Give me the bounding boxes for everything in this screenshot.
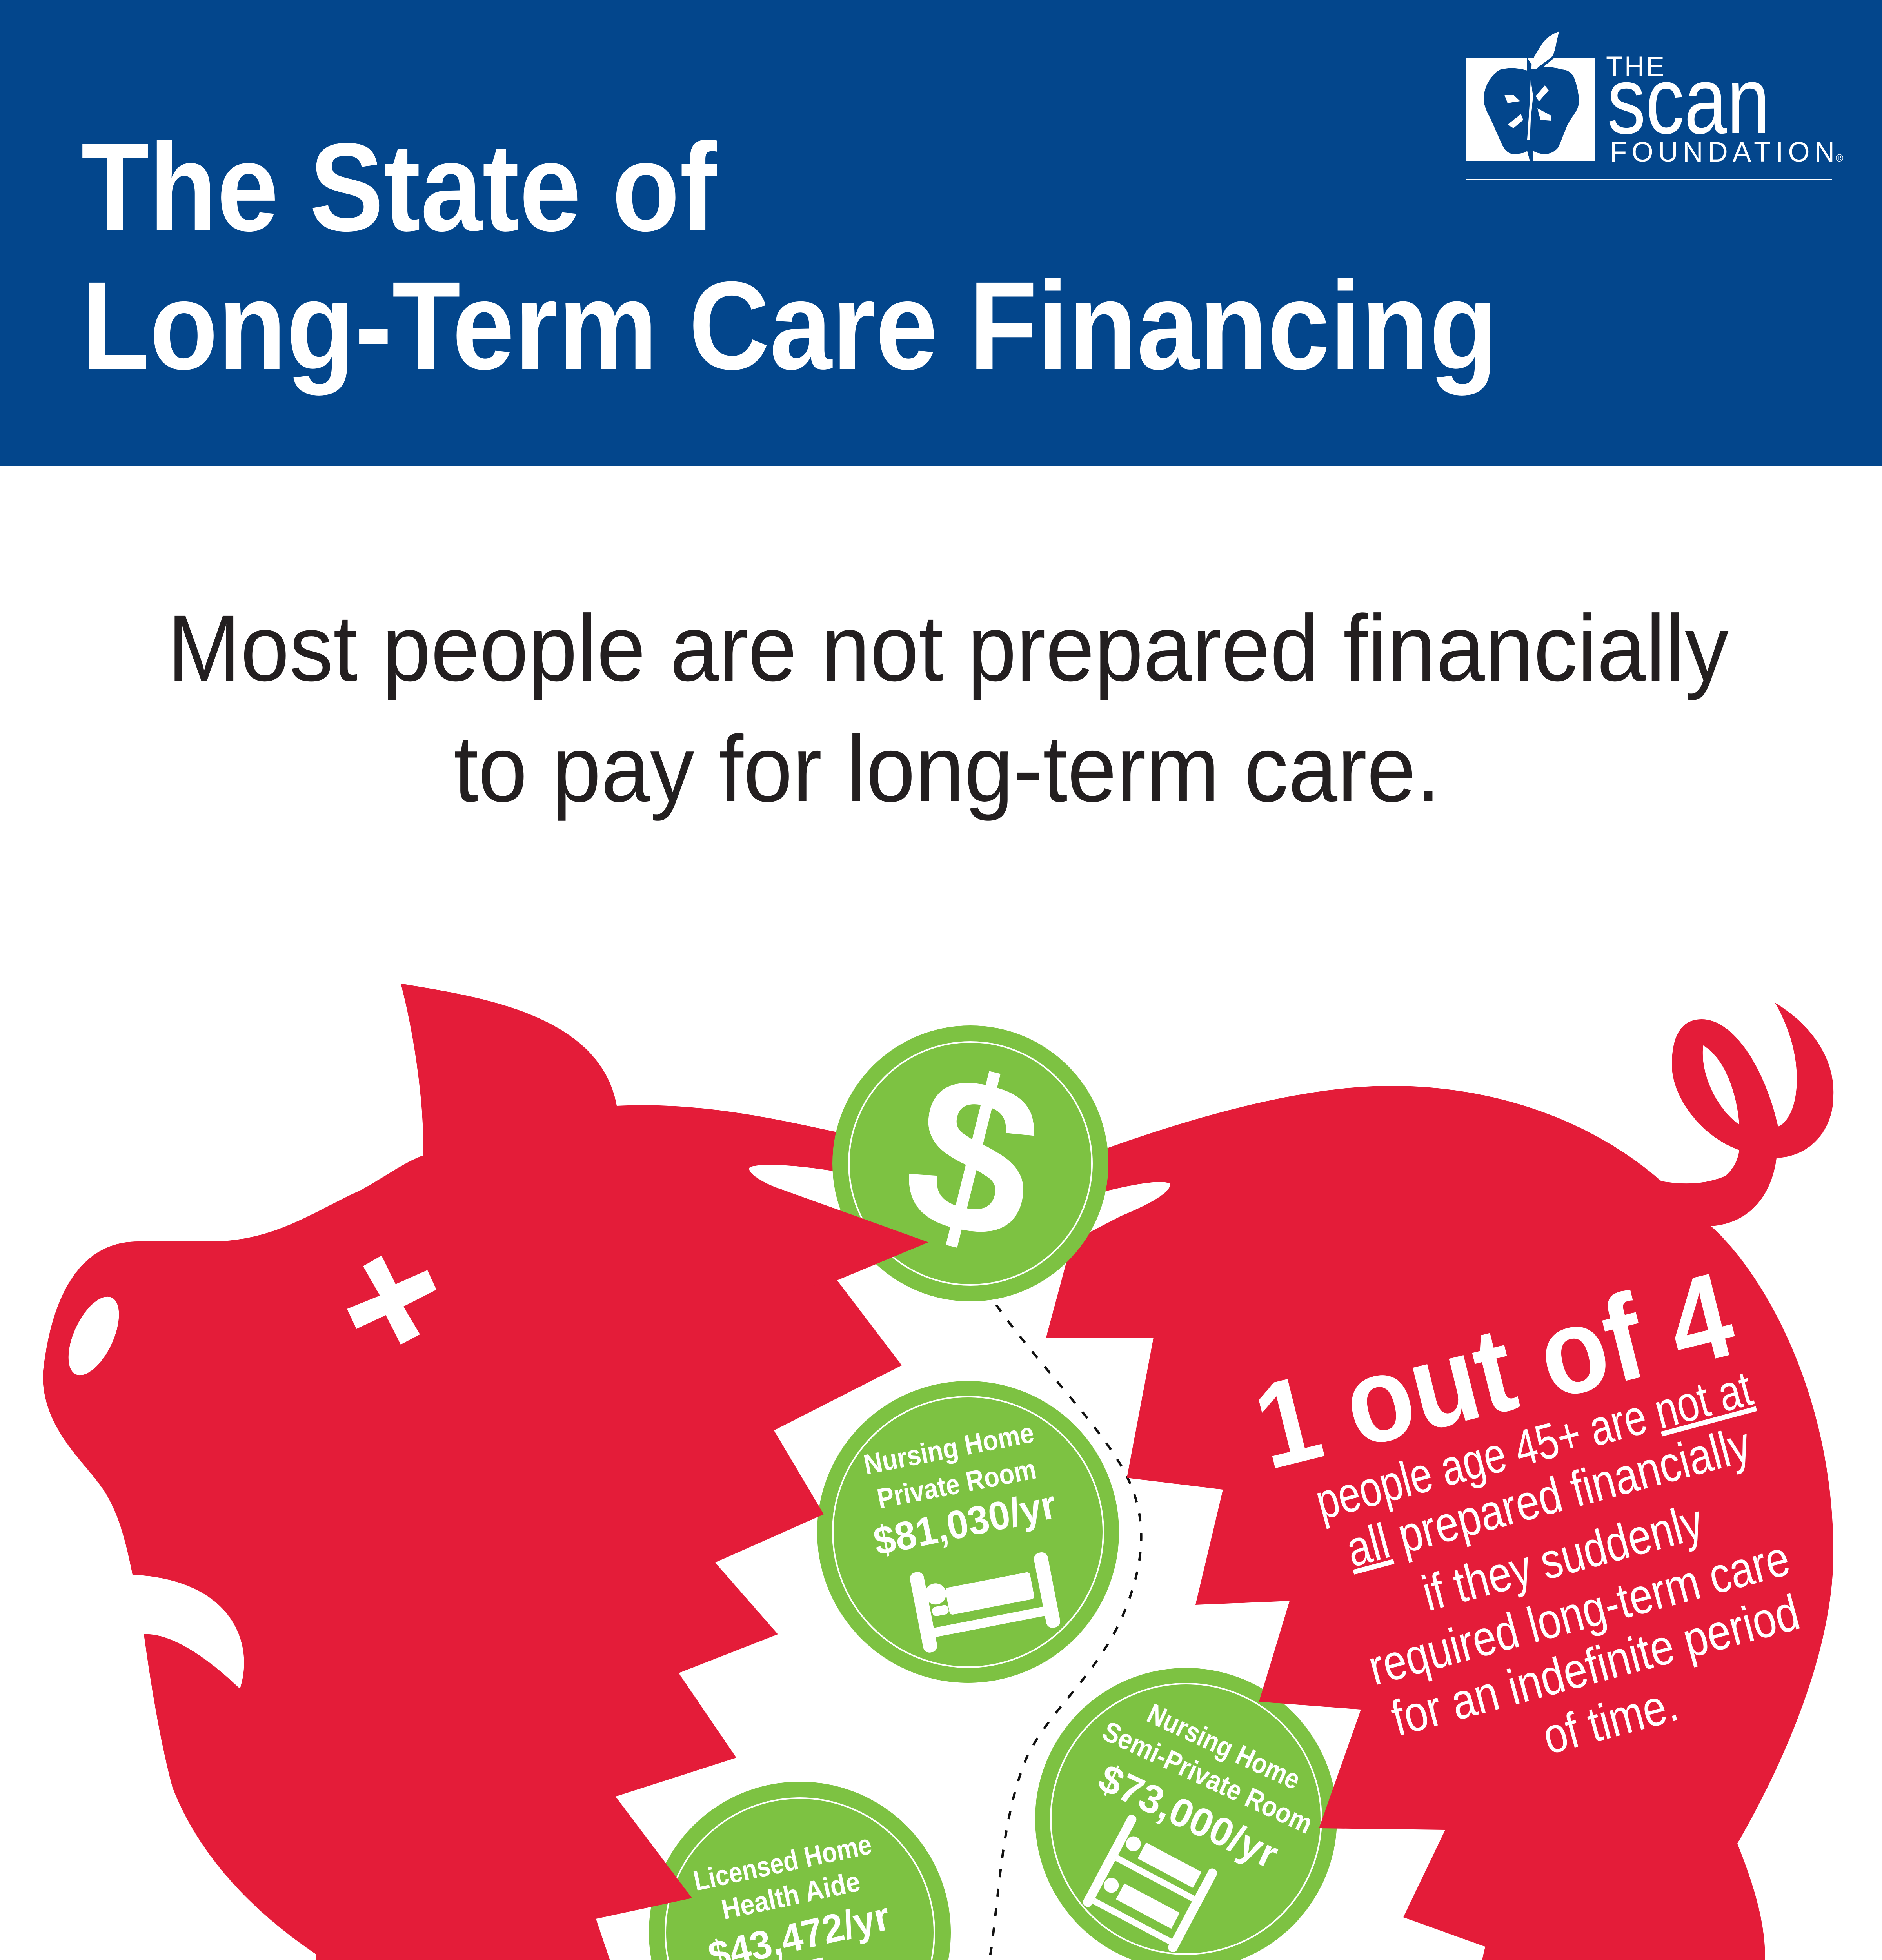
logo wordmark: [1466, 47, 1843, 180]
dollar coin: [832, 1023, 1108, 1301]
icon: dollar sign: $: [885, 1023, 1062, 1290]
icon: bed: [909, 1547, 1061, 1654]
left pig snout tip overlapping coin: [780, 1189, 928, 1294]
label: Health Aide: [719, 1866, 863, 1926]
label: [861, 1417, 1060, 1564]
headline: 1 out of 4: 1 out of 4: [1242, 1245, 1746, 1495]
left half of broken piggy bank: [43, 984, 928, 1960]
subtitle: to pay for long-term care.: [454, 716, 1441, 821]
coin: licensed home health aide: [649, 1782, 951, 1960]
icon: apple logo: [1466, 31, 1595, 161]
label: Private Room: [875, 1454, 1039, 1515]
label: $73,000/yr: [1092, 1755, 1285, 1877]
logo wordmark: scan: [1607, 47, 1770, 154]
logo: The SCAN Foundation: [1466, 31, 1843, 180]
icon: two beds: [1081, 1813, 1223, 1954]
body text: of time.: [1537, 1675, 1684, 1765]
title: [81, 117, 1498, 396]
coin: nursing home private room: [817, 1381, 1119, 1683]
title: The State of: [81, 117, 718, 257]
label: Nursing Home: [1143, 1698, 1305, 1796]
subtitle: [167, 595, 1729, 821]
pig eye: X mark: [347, 1256, 436, 1345]
label: Semi-Private Room: [1098, 1715, 1317, 1840]
header band: [0, 0, 1882, 466]
label: [1092, 1698, 1317, 1877]
label: [691, 1829, 894, 1960]
body text: if they suddenly: [1417, 1494, 1709, 1622]
right half of broken piggy bank: [1046, 1003, 1833, 1960]
dashed path of falling coins: [921, 1305, 1350, 1960]
logo wordmark: FOUNDATION: [1610, 137, 1835, 168]
label: Nursing Home: [861, 1417, 1037, 1481]
body text: for an indefinite period: [1386, 1584, 1805, 1747]
label: Licensed Home: [691, 1829, 874, 1897]
icon: nurse at bedside: [761, 1952, 870, 1960]
body text: all prepared financially: [1341, 1416, 1757, 1578]
pig nostril: [58, 1289, 129, 1383]
body text: people age 45+ are not at: [1310, 1360, 1758, 1530]
label: $81,030/yr: [870, 1482, 1060, 1564]
body text: [1310, 1360, 1805, 1765]
title: Long-Term Care Financing: [81, 255, 1498, 396]
subtitle: Most people are not prepared financially: [167, 595, 1729, 701]
body text: required long-term care: [1362, 1530, 1795, 1696]
logo wordmark: ®: [1836, 152, 1843, 164]
coin: nursing home semi-private room: [1035, 1668, 1337, 1960]
logo wordmark: THE: [1606, 51, 1664, 82]
